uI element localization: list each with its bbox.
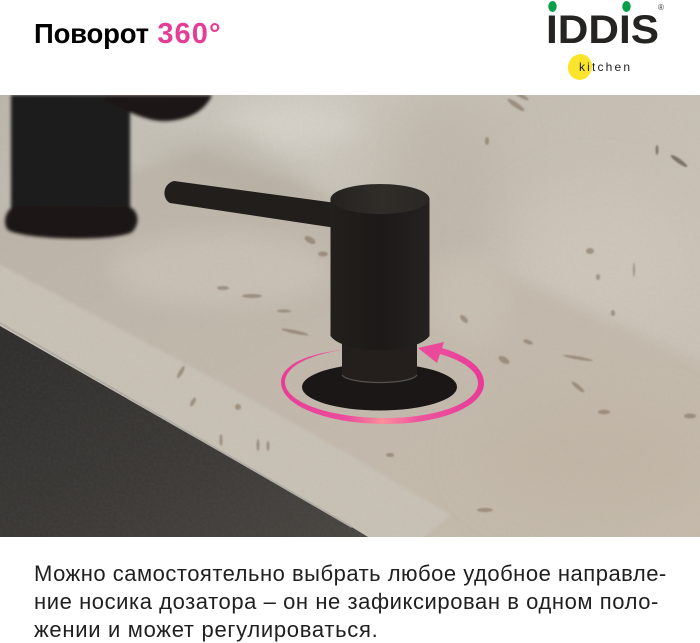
description text — [34, 561, 667, 642]
wall background — [0, 95, 700, 537]
faucet stem — [11, 95, 130, 220]
faucet spout — [105, 95, 212, 121]
title: Поворот 360° — [34, 18, 222, 50]
description text: Можно самостоятельно выбрать любое удобное направле- — [34, 561, 667, 586]
counter soft tones — [110, 130, 700, 505]
counter top surface — [0, 150, 700, 560]
photo: black soap dispenser on travertine counter — [0, 95, 700, 537]
kitchen label: kitchen — [579, 60, 630, 74]
soap dispenser — [164, 181, 457, 410]
sink rim highlight — [0, 323, 352, 527]
arrow head — [418, 342, 444, 363]
stone grain — [0, 95, 700, 537]
dispenser neck — [342, 340, 417, 384]
arrow ring — [281, 347, 484, 424]
wall shading — [220, 80, 690, 340]
dispenser base disc — [302, 364, 457, 410]
dispenser cap — [330, 184, 430, 214]
sink basin — [0, 326, 368, 537]
stone pits — [176, 88, 696, 512]
faucet base — [5, 206, 137, 239]
logo dots — [548, 1, 631, 12]
neck ring — [342, 375, 417, 382]
description text: жении и может регулироваться. — [34, 617, 378, 642]
dispenser body — [330, 198, 430, 350]
dispenser handle — [164, 181, 336, 228]
logo wordmark: IDDIS — [546, 8, 659, 52]
logo: IDDIS kitchen — [546, 1, 664, 80]
background faucet — [5, 95, 212, 239]
registered mark: ® — [658, 3, 664, 12]
counter front edge — [0, 262, 450, 545]
description text: ние носика дозатора – он не зафиксирован в одном поло- — [34, 589, 659, 614]
yellow blob — [565, 51, 595, 83]
rotation arrow — [281, 342, 484, 424]
